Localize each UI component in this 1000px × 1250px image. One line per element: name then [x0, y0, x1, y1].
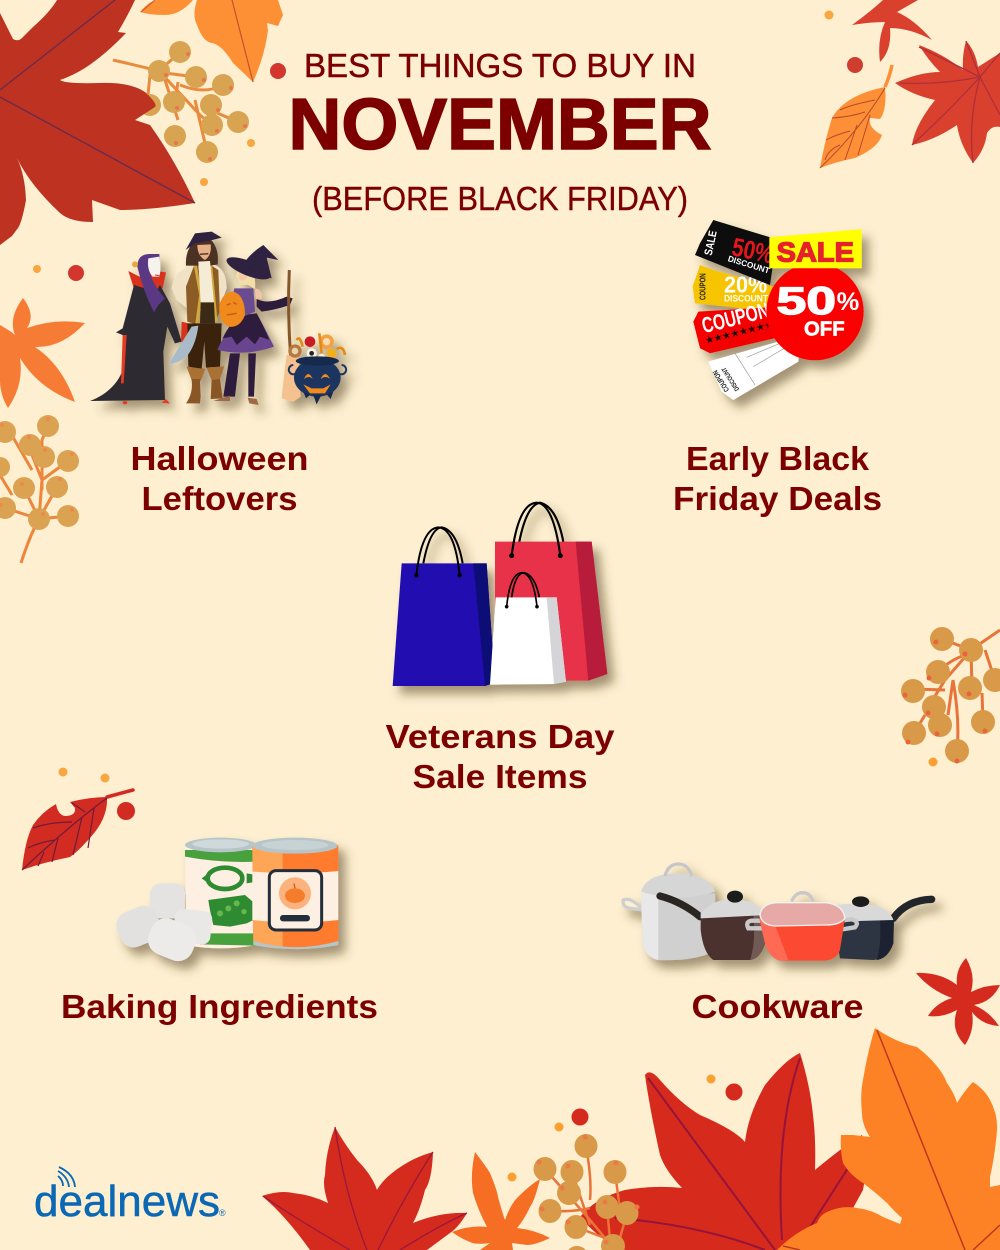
witch [213, 245, 293, 405]
red pot [747, 893, 857, 961]
logo signal arcs [58, 1167, 75, 1187]
label: veterans day sale items: Sale Items [412, 759, 588, 796]
white ticket: COUPON [711, 369, 731, 394]
decoration: bottom red maple leaf [262, 1127, 467, 1250]
label: early black friday deals: Friday Deals [673, 481, 882, 518]
red coupon: ★★★★★★★★ [704, 319, 775, 347]
icon: halloween costumes [90, 232, 346, 405]
red circle badge: OFF [804, 317, 845, 340]
label: early black friday deals [673, 441, 882, 518]
white bag [490, 573, 566, 685]
yellow ticket: COUPON [697, 273, 707, 300]
yellow ticket: 20% [724, 272, 768, 298]
icon: cookware [623, 864, 932, 961]
decoration: bottom right big orange leaf [777, 1028, 1000, 1250]
label: halloween leftovers: Leftovers [142, 481, 298, 518]
title [288, 48, 712, 218]
yellow sale banner [769, 229, 862, 268]
red circle badge: 50 [777, 280, 836, 323]
white ticket [708, 339, 799, 400]
label: halloween leftovers: Halloween [130, 441, 308, 478]
icon: coupons and sale tag [693, 220, 864, 400]
decoration: left berries [0, 415, 79, 563]
label: cookware: Cookware [692, 989, 864, 1026]
logo: dealnews [34, 1167, 226, 1226]
label: veterans day sale items: Veterans Day [386, 719, 615, 756]
title line three: (BEFORE BLACK FRIDAY) [312, 181, 688, 218]
yellow ticket: DISCOUNT [724, 294, 768, 304]
blue bag [393, 527, 495, 686]
decoration: right berries [901, 627, 1000, 766]
red circle badge [766, 263, 864, 360]
brown saucepan [660, 891, 767, 960]
white ticket: DISCOUNT [721, 366, 741, 392]
green bean can [185, 838, 257, 948]
title line two: NOVEMBER [288, 85, 712, 165]
navy saucepan [833, 896, 932, 960]
decoration: top-left orange leaves [140, 0, 283, 82]
silver stockpot [623, 864, 717, 960]
logo wordmark: dealnews [34, 1177, 220, 1226]
black ticket: 50% [729, 231, 776, 270]
logo registered mark: ® [219, 1208, 226, 1218]
vampire [90, 254, 182, 404]
black ticket [695, 220, 777, 285]
decoration: dots top-left [33, 63, 286, 281]
candy cauldron [288, 333, 346, 404]
decoration: bottom right big red leaf [580, 1053, 868, 1250]
decoration: small red maple bottom right [916, 958, 1000, 1045]
label: veterans day sale items [386, 719, 615, 796]
decoration: bottom dots [508, 1074, 742, 1182]
red coupon [693, 297, 782, 353]
black ticket: DISCOUNT [727, 253, 771, 276]
pumpkin can [252, 838, 338, 949]
decoration: left orange maple leaf [0, 298, 85, 408]
pirate [168, 232, 227, 403]
title line one: BEST THINGS TO BUY IN [304, 48, 696, 85]
decoration: top-right leaves [820, 0, 1000, 168]
red coupon: COUPON [699, 297, 772, 338]
decoration: top-left berries [113, 41, 249, 163]
red circle badge: % [837, 288, 859, 316]
decoration: bottom berries [534, 1134, 640, 1250]
icon: cans and marshmallows [112, 838, 338, 966]
icon: shopping bags [393, 503, 607, 686]
marshmallows [112, 883, 213, 966]
black ticket: SALE [703, 229, 720, 257]
decoration: left red leaf with dots [22, 768, 135, 870]
decoration: big top-left red leaf [0, 0, 195, 245]
yellow sale banner: SALE [777, 237, 854, 268]
red bag [495, 503, 607, 681]
decoration: bottom small orange maple [452, 1152, 550, 1250]
label: early black friday deals: Early Black [686, 441, 869, 478]
broom [282, 270, 301, 402]
yellow ticket [693, 265, 773, 312]
label: baking ingredients: Baking Ingredients [61, 989, 378, 1026]
label: halloween leftovers [130, 441, 308, 518]
